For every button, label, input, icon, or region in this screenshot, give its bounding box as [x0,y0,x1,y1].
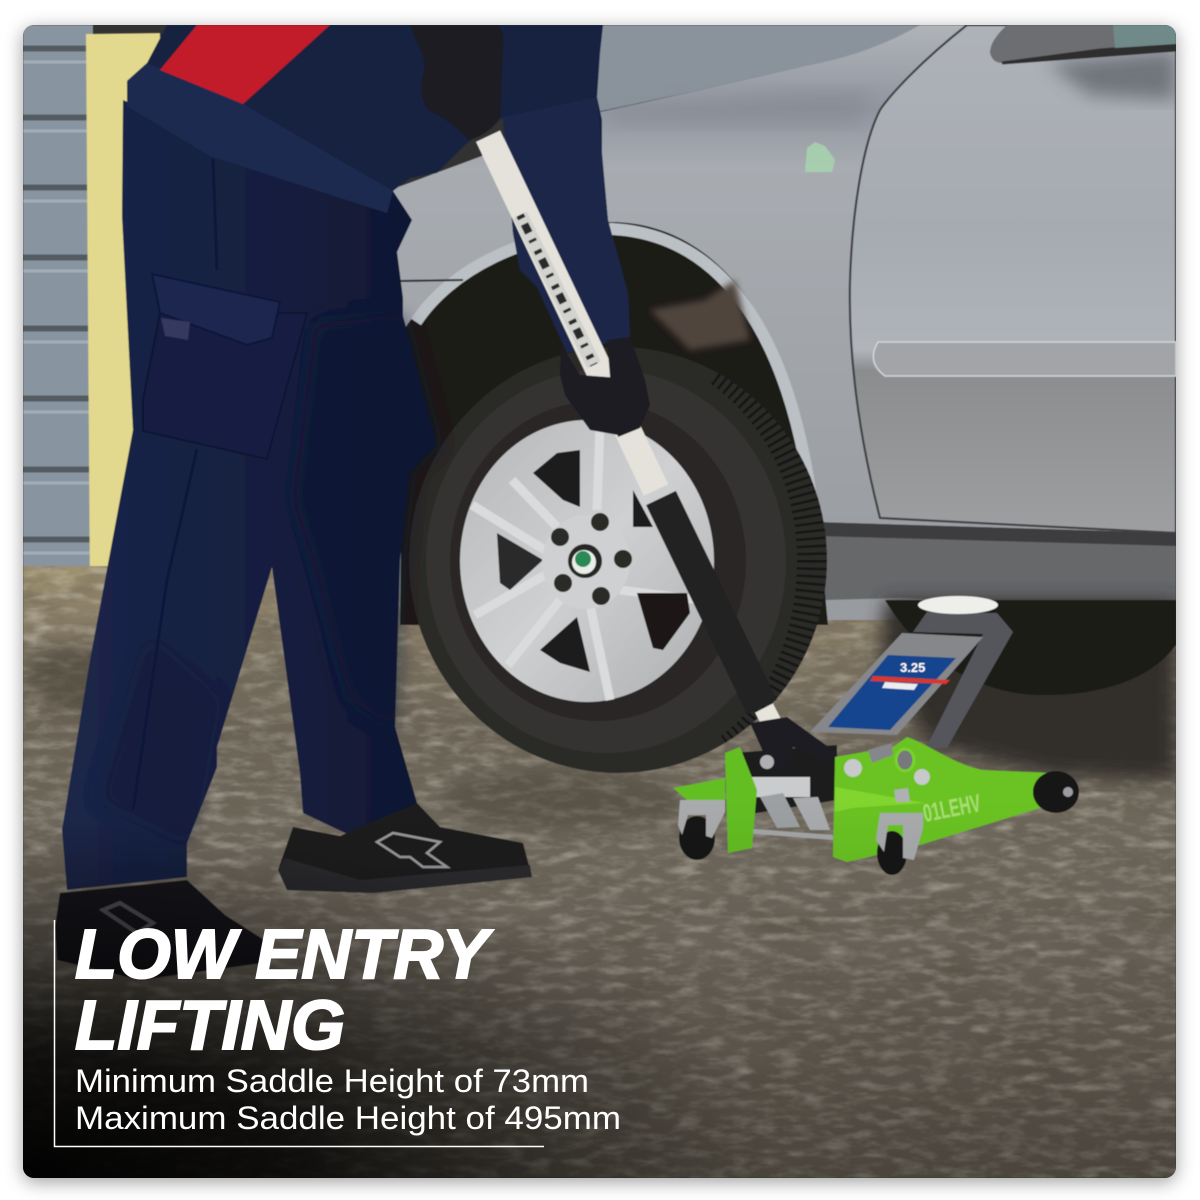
saddle height specs: Minimum Saddle Height of 73mm [75,1063,589,1099]
trolley jack [673,596,1079,875]
jack model text: 01LEHV [921,789,983,828]
grey insert [868,743,893,763]
headline: LIFTING [75,986,345,1064]
bottom-left dark gradient [23,800,1176,1178]
spokes highlight [472,425,700,700]
back pocket [402,321,420,470]
wing mirror [990,25,1176,63]
frame highlight [835,787,925,812]
jack lifting arm and saddle [913,596,1013,748]
blue label: 3.25 [900,660,925,675]
mirror shadow [1047,50,1176,100]
wheel arch [400,222,828,625]
jacket [127,25,630,353]
dark internals [733,745,837,815]
hub [541,525,622,608]
red panel [160,25,330,104]
black handle socket [750,717,837,767]
green side frame [833,737,1052,862]
grey cover plate [810,633,983,735]
caption bracket [54,920,544,1146]
suspension [650,280,750,350]
green sticker mark [805,142,835,172]
shoes [55,803,532,980]
trousers [62,100,437,890]
under-car shadow and rear tyre [880,600,1176,780]
saddle height specs: Maximum Saddle Height of 495mm [75,1100,621,1136]
headline [75,915,493,1064]
windscreen [597,25,920,112]
trouser seams [133,159,217,810]
right shoe [278,803,532,893]
hood reflection band [659,94,857,119]
cargo pocket [143,274,307,459]
blue label [828,655,956,730]
door panel [850,25,1176,533]
leg fold shading [100,640,215,840]
upper glove [410,25,503,140]
corrugated wall [23,25,93,570]
car body [390,25,1176,625]
rim openings [533,450,580,507]
door rubbing strip [873,342,1176,376]
green front frame [673,747,757,853]
lower glove [560,337,650,437]
hydraulic rams [730,777,833,840]
left shoe [55,880,272,980]
ground [23,566,1176,1178]
yellow post [86,33,160,592]
inner leg shading [290,316,437,727]
alloy wheel [460,420,714,702]
caster wheels [678,771,1079,875]
jack bolts [760,749,930,802]
saddle height specs [75,1063,621,1136]
jack handle [488,136,778,735]
headline: LOW ENTRY [75,915,493,993]
front tyre [409,347,827,773]
sill [824,536,1176,601]
